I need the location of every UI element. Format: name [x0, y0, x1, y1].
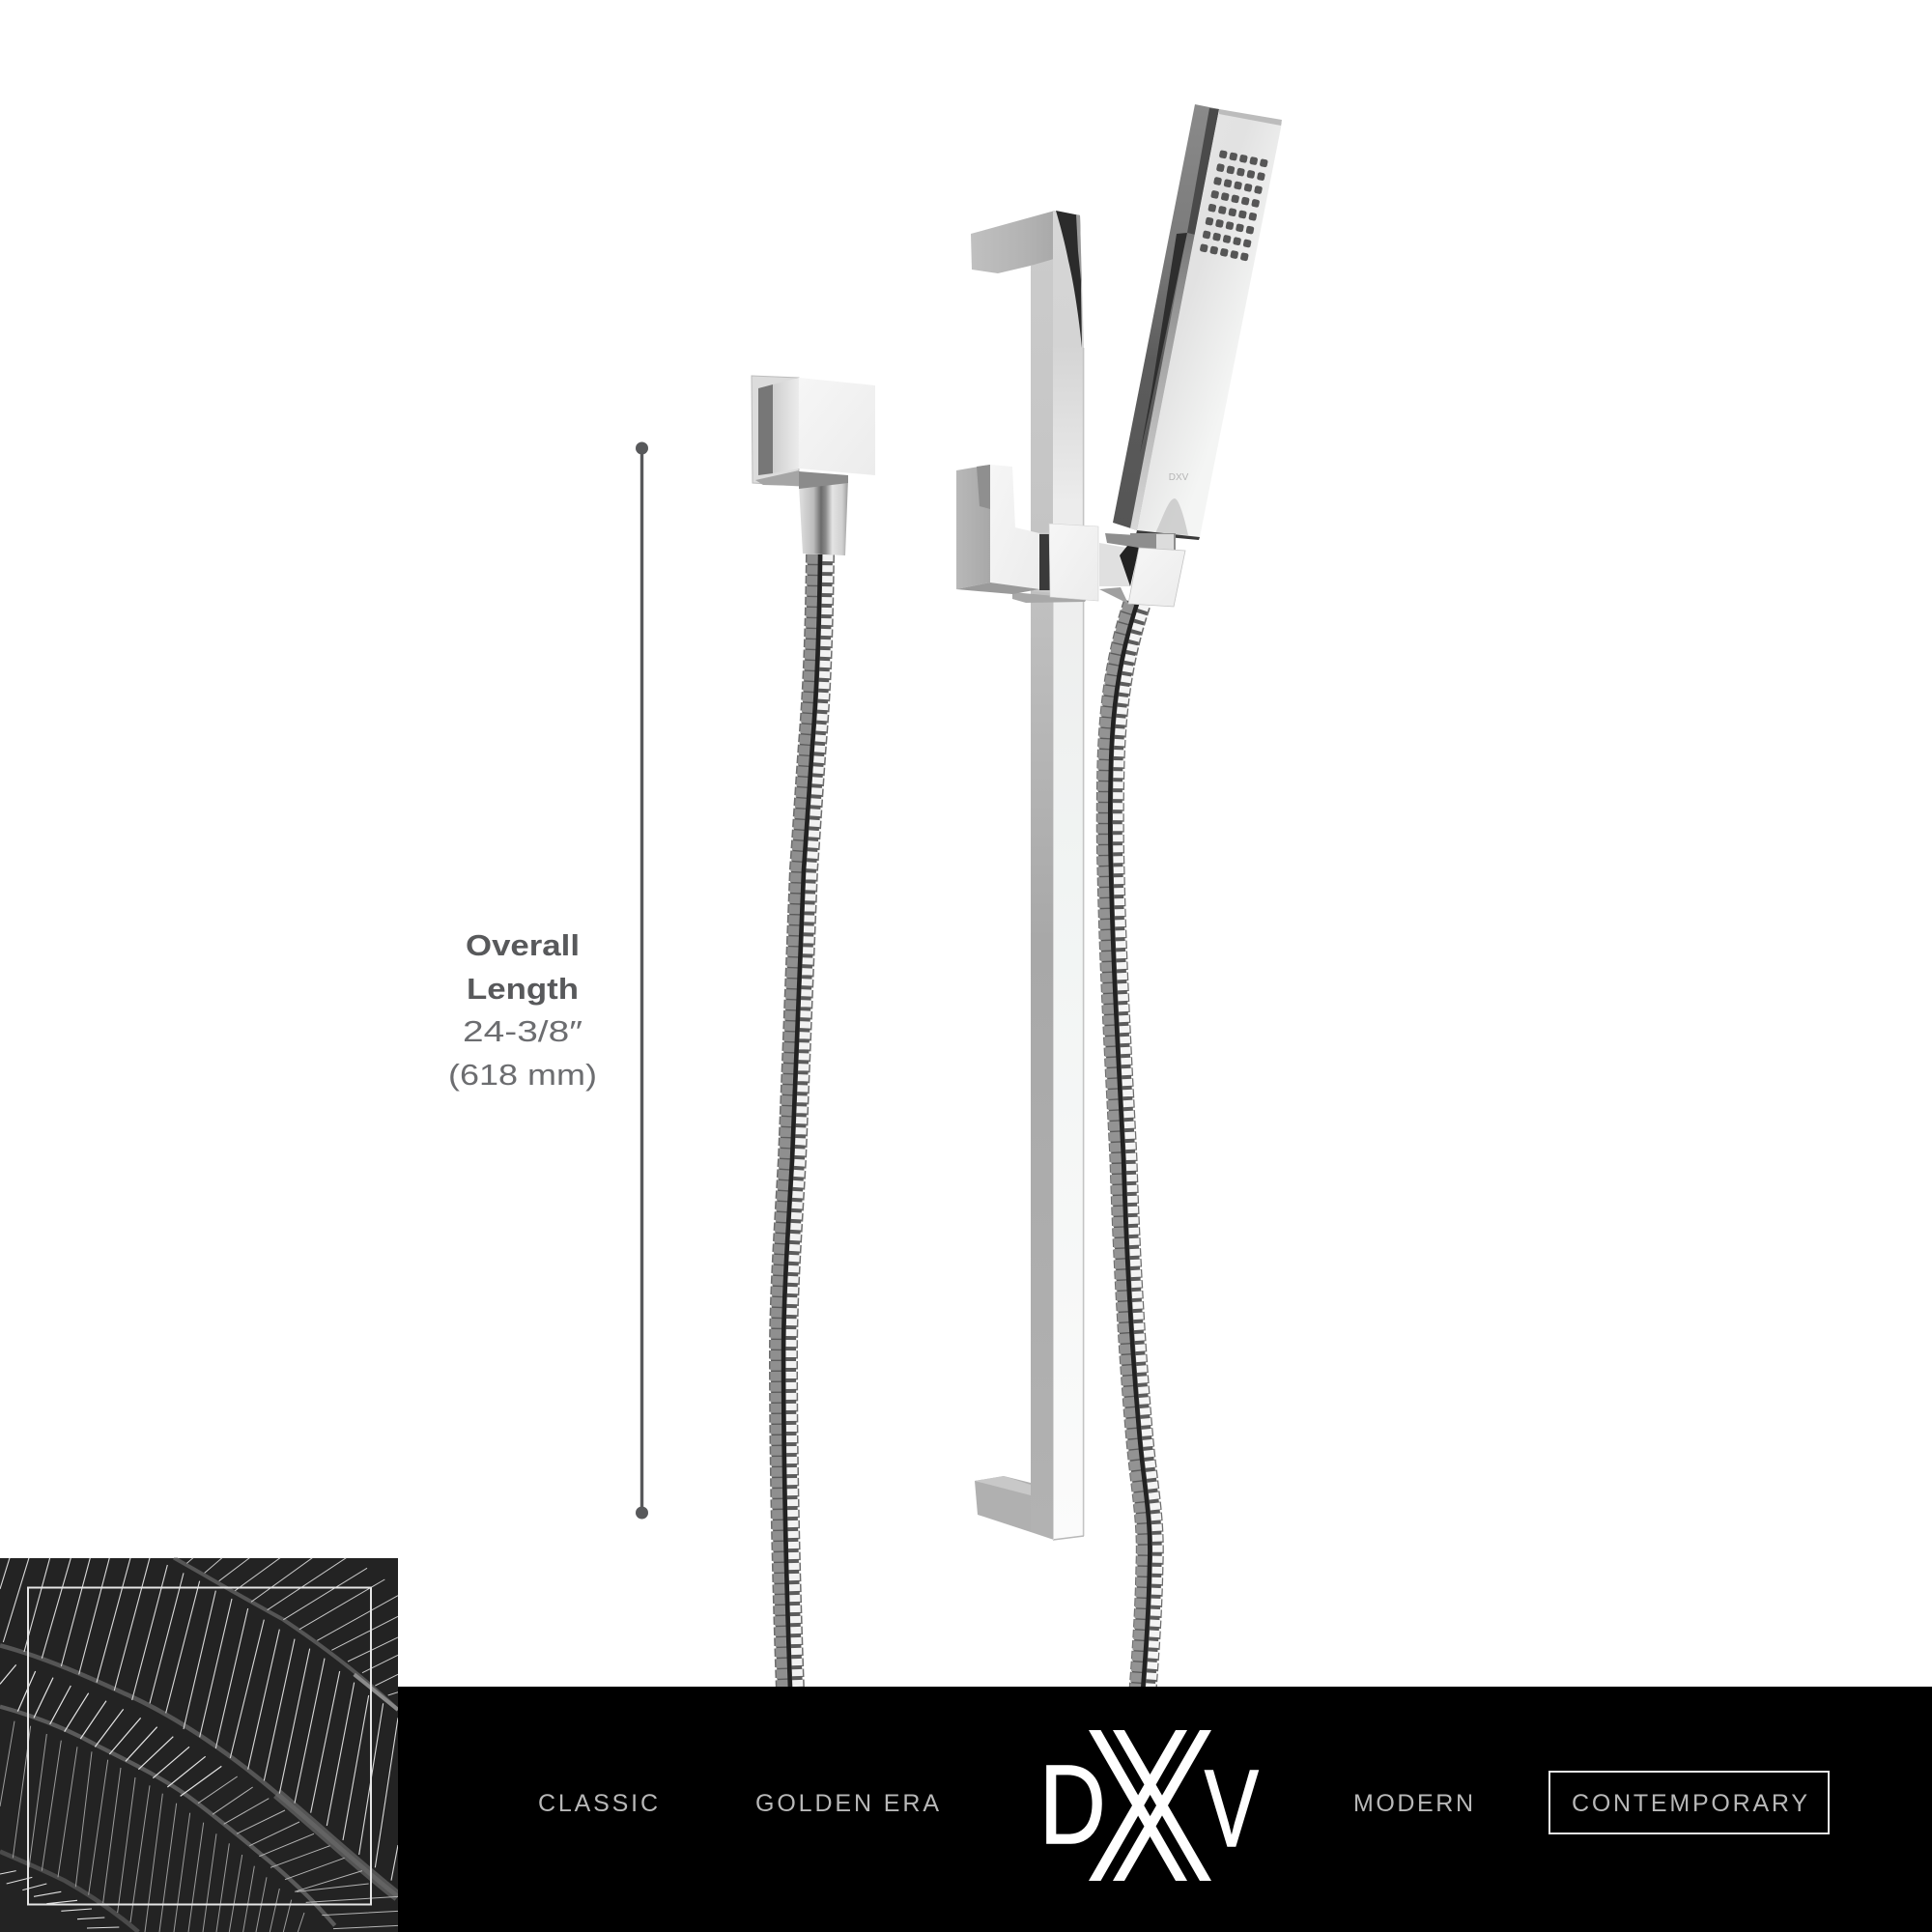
architectural photo corner [0, 1558, 398, 1932]
spray nozzles [1200, 150, 1268, 262]
slider bracket and handle [956, 465, 1136, 604]
dimension: overall length line [636, 442, 648, 1519]
slats: middle field [0, 1664, 221, 1796]
slats: upper field [0, 1558, 398, 1881]
handset logo mark: DXV [1169, 472, 1189, 483]
footer band [398, 1687, 1932, 1932]
dimension label: overall length: Length [467, 972, 579, 1006]
dimension label: overall length: (618 mm) [448, 1058, 597, 1092]
photo frame [28, 1588, 371, 1905]
brand logo: DXV [1039, 1730, 1259, 1881]
brand logo: DXV: D [1039, 1743, 1106, 1867]
dimension label: overall length: Overall [466, 928, 580, 962]
slats: lower field [0, 1721, 304, 1932]
nav label: classic: CLASSIC [538, 1790, 658, 1817]
dimension label: overall length: 24-3/8″ [463, 1014, 582, 1048]
nav label: golden era: GOLDEN ERA [755, 1790, 939, 1817]
slats: bottom left field [0, 1871, 119, 1928]
slats: top right field [186, 1558, 398, 1695]
hose: right, from handset connector [1103, 604, 1157, 1690]
wall connector [752, 376, 875, 555]
nav label: contemporary, boxed: CONTEMPORARY [1572, 1790, 1807, 1817]
dimension label: overall length [448, 928, 597, 1092]
brand logo: DXV: V [1205, 1748, 1259, 1870]
nav label: modern: MODERN [1353, 1790, 1473, 1817]
nav label: contemporary, boxed [1549, 1772, 1829, 1833]
slide bar [971, 211, 1084, 1540]
handset connector [1120, 533, 1185, 607]
hand shower head [1113, 104, 1282, 540]
hose: left, from wall connector [777, 554, 828, 1690]
